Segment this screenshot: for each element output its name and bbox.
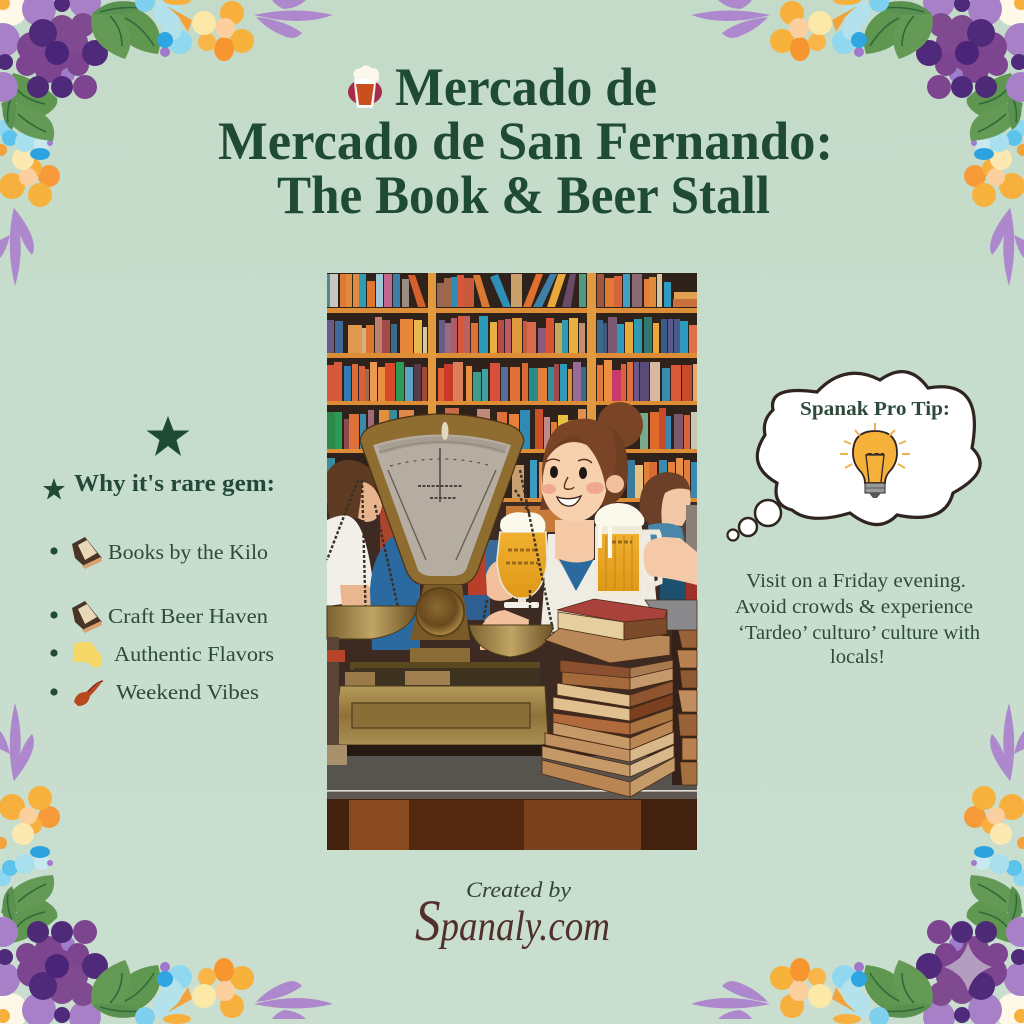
scale beam and base bbox=[334, 648, 548, 745]
left beer glass bbox=[497, 512, 547, 608]
list item: authentic flavors bbox=[50, 642, 274, 668]
list item: craft beer haven: Craft Beer Haven bbox=[108, 604, 269, 628]
list item: books by the kilo bbox=[50, 537, 268, 569]
floral corner: top right bbox=[691, 0, 1024, 286]
title line 2: Mercado de San Fernando: bbox=[218, 111, 833, 171]
icon: light bulb bbox=[840, 423, 910, 498]
list item: craft beer haven bbox=[50, 601, 269, 633]
hand toasting with mug bbox=[644, 537, 697, 585]
title line 3: The Book & Beer Stall bbox=[277, 165, 770, 225]
tip body text: ‘Tardeo’ culturo’ culture with bbox=[738, 622, 980, 644]
stack of old books bbox=[542, 599, 697, 797]
tip body text bbox=[735, 570, 980, 668]
right beer mug bbox=[595, 503, 661, 598]
counter bbox=[327, 637, 697, 850]
right scale pan bbox=[469, 625, 553, 657]
person: man at left bbox=[327, 460, 382, 606]
tip heading: Spanak Pro Tip: bbox=[800, 398, 950, 420]
footer credit: Spanaly.com bbox=[415, 888, 610, 953]
footer credit: Created by bbox=[466, 877, 571, 902]
left scale pan bbox=[327, 606, 417, 639]
list item: weekend vibes bbox=[50, 680, 259, 706]
floral corner: bottom right bbox=[691, 703, 1024, 1024]
list panel: why it's rare gem bbox=[43, 416, 275, 706]
icon: large star bbox=[146, 416, 190, 456]
tip body text: Avoid crowds & experience bbox=[735, 596, 973, 618]
woman serving beer bbox=[480, 402, 660, 650]
list item: weekend vibes: Weekend Vibes bbox=[116, 680, 259, 704]
list item: authentic flavors: Authentic Flavors bbox=[114, 642, 274, 666]
panel: illustration of the book and beer stall bbox=[327, 273, 697, 850]
icon: beer glass bbox=[348, 66, 382, 108]
person: man at right bbox=[640, 472, 697, 600]
scale dial bbox=[360, 414, 524, 640]
title line 1: Mercado de bbox=[395, 57, 657, 117]
tip body text: Visit on a Friday evening. bbox=[746, 570, 966, 592]
list item: books by the kilo: Books by the Kilo bbox=[108, 540, 268, 564]
thought bubble: pro tip bbox=[728, 372, 980, 540]
tip body text: locals! bbox=[830, 646, 885, 668]
icon: small star bbox=[43, 478, 65, 500]
lower backdrop books bbox=[327, 502, 697, 752]
list heading: Why it's rare gem: bbox=[74, 471, 275, 497]
person: blue shirt behind the scale bbox=[370, 534, 420, 650]
title bbox=[218, 57, 833, 225]
bookshelves bbox=[327, 273, 697, 502]
floral corner: top left bbox=[0, 0, 333, 286]
scale chains bbox=[327, 470, 555, 650]
scale knob bbox=[416, 588, 464, 636]
floral corner: bottom left bbox=[0, 703, 333, 1024]
